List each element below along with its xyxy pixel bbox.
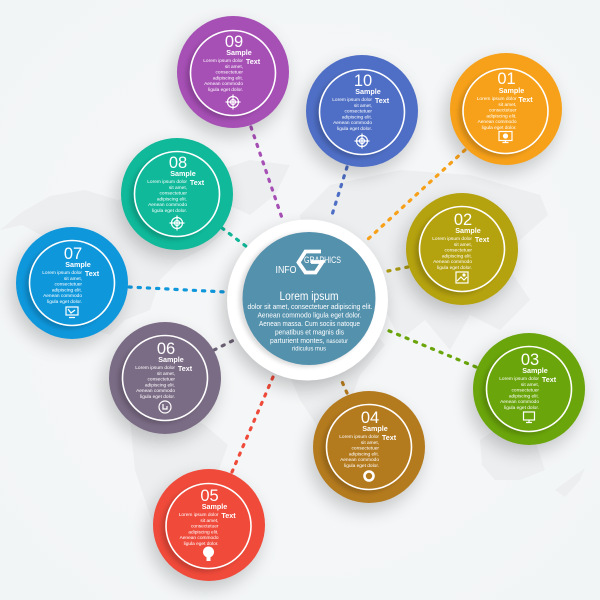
circle 04: Lorem ipsum dolor bbox=[339, 434, 379, 440]
circle 06: adipiscing elit. bbox=[145, 382, 175, 388]
world map bbox=[0, 160, 585, 545]
disc 03 bbox=[473, 333, 585, 445]
circle 08: Aenean commodo bbox=[148, 202, 187, 208]
circle 03: Aenean commodo bbox=[500, 399, 539, 405]
circle 05: consectetuer bbox=[191, 524, 219, 530]
circle 06: ligula eget dolor. bbox=[140, 394, 175, 400]
circle 06 bbox=[105, 322, 221, 442]
circle 06: Text bbox=[178, 364, 193, 373]
icon: light bulb bbox=[203, 546, 214, 561]
circle 02: ligula eget dolor. bbox=[437, 265, 472, 271]
icon: picture bbox=[456, 272, 468, 283]
circle 09: sit amet, bbox=[225, 64, 243, 70]
icon: target bbox=[354, 134, 370, 148]
icon: target bbox=[226, 94, 240, 110]
circle 02: adipiscing elit. bbox=[442, 253, 472, 259]
circle 09: consectetuer bbox=[216, 70, 243, 76]
disc 06 bbox=[109, 322, 221, 434]
icon: chart screen bbox=[66, 307, 78, 318]
circle 10: Text bbox=[375, 96, 390, 105]
circle 08 bbox=[117, 138, 233, 258]
circle 07: ligula eget dolor. bbox=[47, 299, 82, 305]
circle 04: ligula eget dolor. bbox=[344, 463, 379, 469]
disc 04 bbox=[313, 391, 425, 503]
circle 04 bbox=[309, 391, 425, 511]
circle 02: Sample bbox=[455, 226, 481, 235]
circle 06: sit amet, bbox=[157, 371, 175, 377]
circle 07: adipiscing elit. bbox=[52, 287, 82, 293]
disc 10 bbox=[306, 55, 418, 167]
circle 07: Sample bbox=[65, 260, 91, 269]
circle 10: sit amet, bbox=[354, 103, 372, 109]
circle 05: ligula eget dolor. bbox=[184, 541, 218, 547]
white ring bbox=[227, 220, 388, 380]
circle 03: consectetuer bbox=[512, 388, 539, 394]
circle 05: adipiscing elit. bbox=[188, 529, 218, 535]
circle 01: Lorem ipsum dolor bbox=[477, 96, 517, 102]
circle 04: sit amet, bbox=[361, 440, 379, 446]
circle 08: Sample bbox=[170, 169, 196, 178]
circle 07: Lorem ipsum dolor bbox=[42, 270, 82, 276]
circle 03: Text bbox=[542, 375, 557, 384]
circle 01: 01 bbox=[497, 70, 516, 88]
circle 02: Lorem ipsum dolor bbox=[432, 236, 472, 242]
logo: INFO bbox=[276, 264, 296, 276]
circle 05: Lorem ipsum dolor bbox=[179, 512, 219, 518]
connector lines bbox=[129, 127, 476, 472]
circle 07: Text bbox=[85, 269, 100, 278]
circle 04: Sample bbox=[362, 424, 388, 433]
disc 02 bbox=[406, 193, 518, 305]
circle 10: ligula eget dolor. bbox=[337, 126, 372, 132]
circle 01: consectetuer bbox=[489, 108, 517, 114]
icon: screen bbox=[524, 412, 534, 422]
circle 01: adipiscing elit. bbox=[486, 113, 516, 119]
circle 03: Lorem ipsum dolor bbox=[499, 376, 539, 382]
circle 03: ligula eget dolor. bbox=[504, 405, 539, 411]
central panel bbox=[224, 220, 388, 388]
disc 08 bbox=[121, 138, 233, 250]
blue disc bbox=[242, 232, 376, 365]
circle 05: sit amet, bbox=[200, 518, 218, 524]
central text: Lorem ipsum bbox=[280, 291, 338, 303]
circle 09: ligula eget dolor. bbox=[208, 87, 243, 93]
circle 08: 08 bbox=[169, 154, 187, 172]
icon: target bbox=[170, 216, 184, 230]
logo bbox=[276, 252, 341, 276]
circle 04: Aenean commodo bbox=[340, 457, 379, 463]
circle 06: consectetuer bbox=[148, 376, 175, 382]
circle 03: sit amet, bbox=[521, 382, 539, 388]
circle 09: 09 bbox=[225, 33, 243, 51]
central text: Aenean commodo ligula eget dolor. bbox=[258, 310, 362, 320]
circle 04: 04 bbox=[361, 409, 379, 427]
circle 08: adipiscing elit. bbox=[157, 196, 187, 202]
circle 07 bbox=[12, 227, 128, 347]
circle 10: Sample bbox=[355, 87, 381, 96]
circle 03: adipiscing elit. bbox=[509, 393, 539, 399]
circle 07: Aenean commodo bbox=[43, 293, 82, 299]
circle 01: Sample bbox=[499, 86, 524, 95]
circle 10: adipiscing elit. bbox=[342, 114, 372, 120]
circle 08: consectetuer bbox=[160, 190, 187, 196]
circle 08: ligula eget dolor. bbox=[152, 208, 187, 214]
circle 01: Text bbox=[518, 95, 533, 104]
circle 10: Lorem ipsum dolor bbox=[332, 97, 372, 103]
central text: parturient montes, nascetur bbox=[270, 336, 348, 345]
central text: penatibus et magnis dis bbox=[275, 328, 344, 336]
circle 09: Text bbox=[246, 57, 261, 66]
circle 06: Sample bbox=[158, 355, 184, 364]
circle 02: Aenean commodo bbox=[433, 259, 472, 265]
circle 06: 06 bbox=[157, 340, 175, 358]
circle 02: 02 bbox=[454, 211, 472, 229]
circle 02: Text bbox=[475, 235, 490, 244]
circle 09: Lorem ipsum dolor bbox=[203, 58, 243, 64]
circle 10 bbox=[302, 55, 418, 175]
circle 09 bbox=[173, 16, 289, 136]
circle 01: sit amet, bbox=[498, 102, 516, 108]
circle 04: adipiscing elit. bbox=[349, 451, 379, 457]
circle 10: 10 bbox=[354, 72, 372, 90]
circle 07: sit amet, bbox=[64, 276, 82, 282]
circle 04: consectetuer bbox=[352, 446, 379, 452]
central text: Aenean massa. Cum sociis natoque bbox=[259, 319, 360, 328]
circle 02: consectetuer bbox=[445, 248, 472, 254]
circle 04: Text bbox=[382, 433, 397, 442]
icon: badge bbox=[159, 401, 171, 413]
logo: GRAPHICS bbox=[304, 255, 341, 265]
central text bbox=[248, 291, 372, 352]
icon: shutter bbox=[364, 472, 374, 480]
circle 05: 05 bbox=[200, 487, 219, 505]
circle 08: sit amet, bbox=[169, 185, 187, 191]
circle 07: 07 bbox=[64, 245, 82, 263]
circle 09: Aenean commodo bbox=[204, 81, 243, 87]
circle 05: Aenean commodo bbox=[180, 535, 219, 541]
circle 02 bbox=[402, 193, 518, 313]
central text: ridiculus mus bbox=[292, 346, 326, 352]
icon: monitor bbox=[499, 132, 512, 142]
circle 03: 03 bbox=[521, 351, 539, 369]
circle 01: ligula eget dolor. bbox=[482, 125, 516, 131]
disc 01 bbox=[450, 53, 562, 165]
circle 05: Text bbox=[221, 511, 236, 520]
circle 05 bbox=[149, 469, 265, 589]
circle 05: Sample bbox=[202, 502, 227, 511]
circle 10: Aenean commodo bbox=[333, 120, 372, 126]
circle 08: Lorem ipsum dolor bbox=[147, 179, 187, 185]
circle 07: consectetuer bbox=[55, 282, 82, 288]
circle 08: Text bbox=[190, 178, 205, 187]
circle 01: Aenean commodo bbox=[478, 119, 517, 125]
circle 09: Sample bbox=[226, 48, 252, 57]
circle 03: Sample bbox=[522, 366, 548, 375]
circle 09: adipiscing elit. bbox=[213, 75, 243, 81]
circle 03 bbox=[469, 333, 585, 453]
disc 07 bbox=[16, 227, 128, 339]
circle 02: sit amet, bbox=[454, 242, 472, 248]
circle 01 bbox=[446, 53, 562, 173]
circle 06: Lorem ipsum dolor bbox=[135, 365, 175, 371]
disc 05 bbox=[153, 469, 265, 581]
disc 09 bbox=[177, 16, 289, 128]
circle 06: Aenean commodo bbox=[136, 388, 175, 394]
circle 10: consectetuer bbox=[345, 108, 372, 114]
central text: dolor sit amet, consectetuer adipiscing elit. bbox=[248, 302, 372, 311]
